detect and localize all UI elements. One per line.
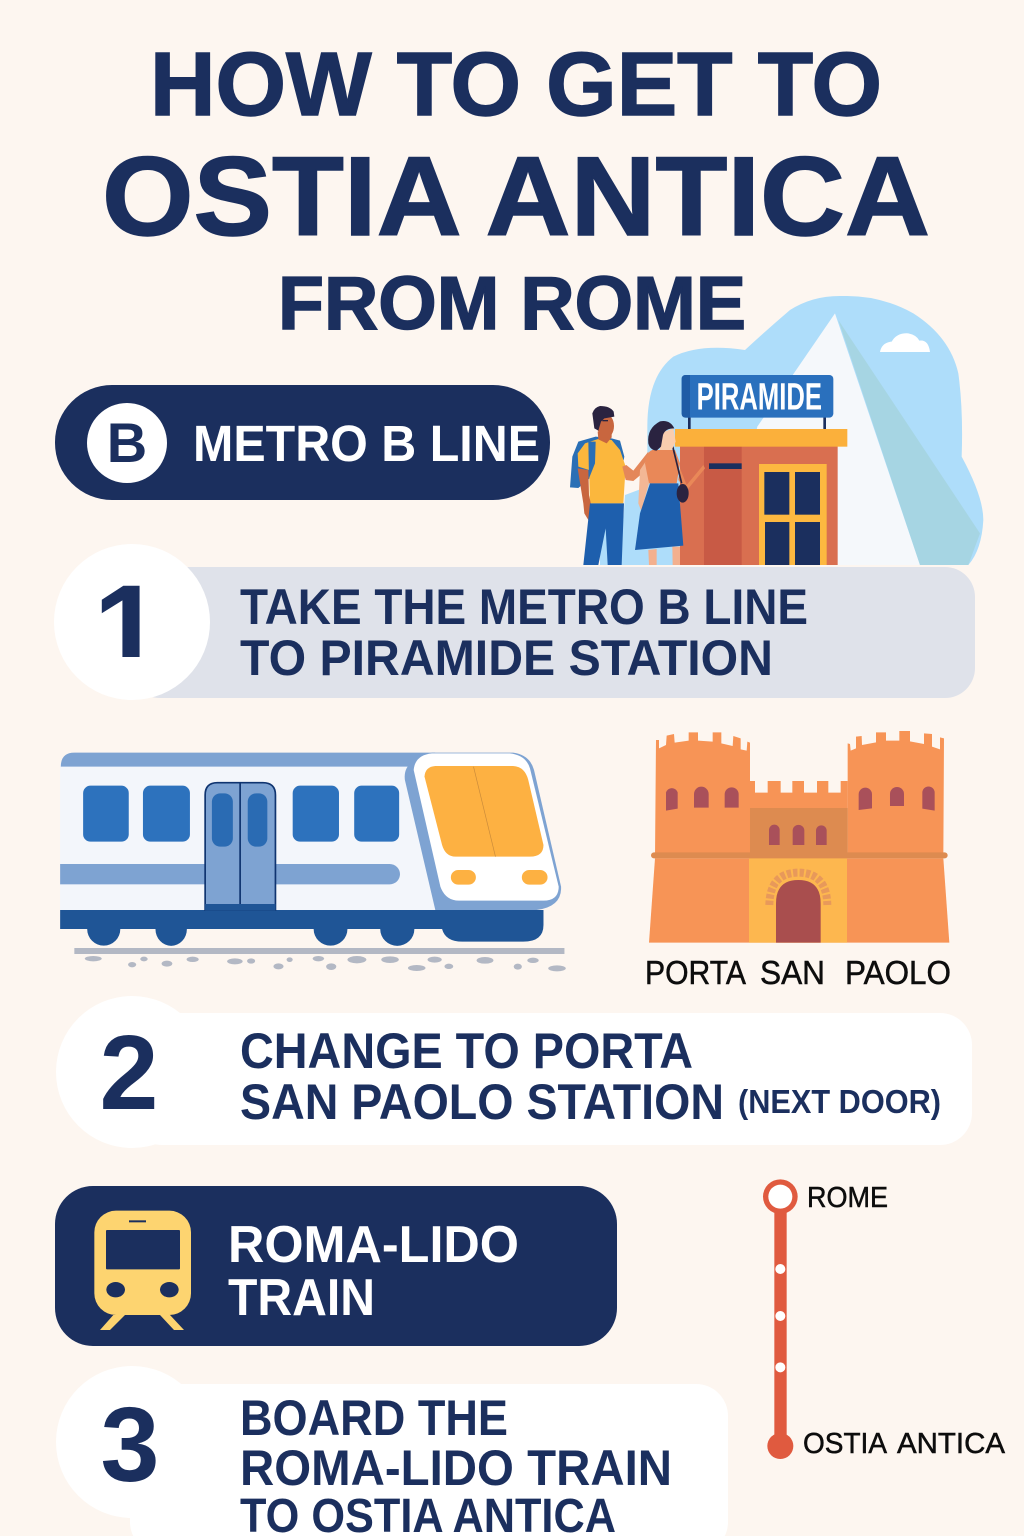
title: HOW TO GET TO	[150, 35, 882, 135]
train door	[205, 783, 275, 911]
panel: Roma-Lido train badge	[55, 1186, 617, 1346]
route labels: OSTIA	[803, 1428, 888, 1460]
illustration: Porta San Paolo gate	[649, 731, 949, 943]
title: OSTIA ANTICA	[102, 134, 930, 259]
route labels: ANTICA	[897, 1428, 1006, 1460]
train nose	[405, 753, 561, 910]
illustration: Piramide station with travellers	[570, 296, 983, 565]
number 1: 1	[93, 560, 163, 699]
gate label: SAN	[760, 954, 825, 991]
icon: B circle	[87, 403, 167, 483]
step 1 text	[240, 579, 808, 686]
step 2 panel	[56, 996, 972, 1148]
route labels	[803, 1182, 1006, 1460]
step 3 text	[240, 1390, 672, 1536]
station sign	[682, 375, 833, 418]
cloud	[880, 333, 930, 352]
badge text	[228, 1216, 519, 1327]
route labels: ROME	[807, 1182, 888, 1214]
step 2 text: CHANGE TO PORTA	[240, 1023, 693, 1079]
step 2 text: (NEXT DOOR)	[738, 1083, 941, 1120]
step 3 panel	[56, 1366, 728, 1536]
step 2 text: SAN PAOLO STATION	[240, 1074, 724, 1130]
gate label	[645, 954, 951, 991]
title	[102, 35, 930, 345]
station building	[675, 417, 847, 565]
woman traveller	[622, 421, 705, 565]
gate label: PAOLO	[845, 954, 951, 991]
step 3 text: BOARD THE	[240, 1390, 508, 1446]
metro heading: METRO B LINE	[193, 415, 540, 472]
step 3 text: ROMA-LIDO TRAIN	[240, 1440, 672, 1496]
icon: train front	[94, 1211, 191, 1330]
step 1 panel	[54, 544, 975, 700]
title: FROM ROME	[278, 261, 746, 345]
step 1 text: TO PIRAMIDE STATION	[240, 630, 773, 686]
panel: metro B line badge	[55, 385, 550, 500]
track and ballast	[74, 948, 566, 971]
step 2 text	[240, 1023, 941, 1130]
badge text: TRAIN	[228, 1269, 375, 1327]
icon: B circle: B	[107, 411, 147, 474]
route line diagram	[763, 1179, 1006, 1460]
badge text: ROMA-LIDO	[228, 1216, 519, 1274]
number 3: 3	[101, 1386, 159, 1504]
number 2: 2	[100, 1014, 158, 1132]
gate label: PORTA	[645, 954, 746, 991]
illustration: metro train	[60, 753, 566, 971]
step 1 text: TAKE THE METRO B LINE	[240, 579, 808, 635]
station sign: PIRAMIDE	[697, 375, 822, 417]
man traveller	[570, 406, 626, 565]
